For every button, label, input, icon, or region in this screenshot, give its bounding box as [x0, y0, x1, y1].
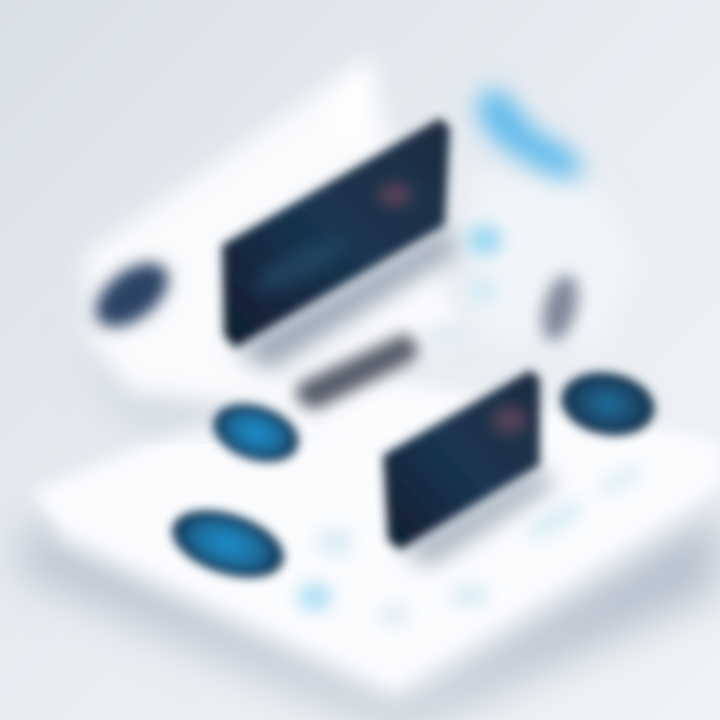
second screen highlight [492, 406, 528, 434]
monitor stand bar [296, 333, 420, 410]
second screen shadow [400, 468, 555, 565]
second screen [383, 370, 540, 550]
back panel [85, 55, 460, 410]
monitor highlights [249, 185, 411, 302]
monitor shadow [235, 230, 460, 370]
blue oval button [206, 394, 306, 472]
back panel shadow [85, 340, 320, 420]
platform [32, 370, 720, 703]
gray small device [536, 271, 584, 345]
lower blue oval button [164, 498, 292, 590]
side card [470, 170, 640, 350]
light blue dots [421, 225, 503, 345]
pale blue floor markers [297, 460, 645, 626]
right dark oval [556, 365, 660, 443]
left small icon [84, 250, 180, 340]
light blue cloud icon [478, 90, 582, 178]
main monitor screen [222, 118, 450, 348]
platform shadow [20, 505, 720, 720]
